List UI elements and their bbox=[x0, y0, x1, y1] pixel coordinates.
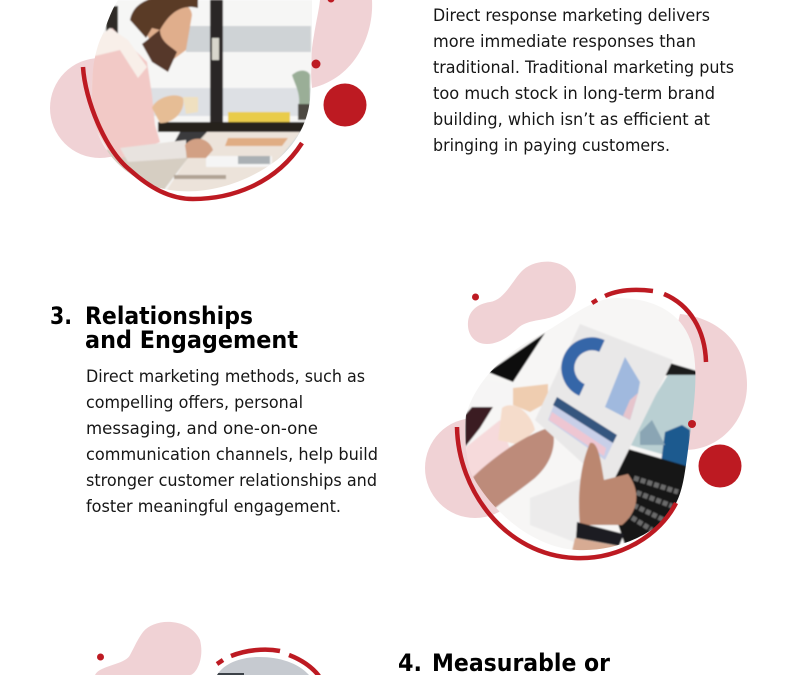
decorative pink blob top right bbox=[311, 0, 372, 88]
section 2 body text: Direct response marketing delivers bbox=[433, 6, 710, 25]
photo top bbox=[217, 657, 309, 675]
section 3 heading: Relationships bbox=[85, 302, 253, 330]
red arc under photo bbox=[83, 67, 302, 199]
large red circle bbox=[698, 444, 742, 488]
arc top bbox=[605, 290, 653, 296]
section 3 heading bbox=[50, 302, 298, 354]
arc top bbox=[231, 650, 280, 656]
section 3 body text: messaging, and one-on-one bbox=[86, 419, 318, 438]
man's head and hair bbox=[146, 6, 193, 60]
decorative pink blob bbox=[95, 622, 201, 675]
decorative pink circle left bbox=[425, 418, 525, 518]
section 2 body text: too much stock in long-term brand bbox=[433, 84, 715, 103]
section 3 heading: and Engagement bbox=[85, 326, 298, 354]
section 4 illustration: cropped photo bbox=[95, 622, 319, 675]
man's shirt bbox=[90, 28, 160, 158]
decorative pink blob top bbox=[468, 262, 576, 344]
photo: hands holding charts bbox=[465, 298, 696, 550]
section 3 body text: communication channels, help build bbox=[86, 445, 378, 464]
large red circle bbox=[324, 84, 366, 126]
front hand and watch bbox=[579, 443, 636, 525]
section 3 illustration: analytics report photo bbox=[425, 262, 747, 560]
arc dash bbox=[217, 660, 223, 664]
small red dot top left bbox=[472, 294, 479, 300]
desk bbox=[166, 131, 300, 192]
decorative pink circle left bbox=[50, 58, 150, 158]
arc dash top bbox=[592, 300, 597, 303]
section 2 illustration: office worker photo bbox=[50, 0, 372, 200]
left hand bbox=[473, 427, 554, 512]
section 3 heading: 3. bbox=[50, 302, 72, 330]
arc right bbox=[664, 294, 706, 362]
small red dot right bbox=[688, 420, 696, 428]
section 2 body text: traditional. Traditional marketing puts bbox=[433, 58, 734, 77]
section 3 body text: compelling offers, personal bbox=[86, 393, 303, 412]
section 3 body text bbox=[86, 367, 378, 516]
decorative pink blob right bbox=[660, 314, 747, 450]
report sheet bbox=[535, 324, 673, 488]
section 2 body text: building, which isn’t as efficient at bbox=[433, 110, 710, 129]
section 2 body text: more immediate responses than bbox=[433, 32, 696, 51]
small red dot on blob bbox=[312, 60, 320, 68]
small red dot bbox=[97, 654, 104, 660]
small red dot at top edge bbox=[328, 0, 334, 2]
section 3 body text: Direct marketing methods, such as bbox=[86, 367, 365, 386]
section 2 body text: bringing in paying customers. bbox=[433, 136, 670, 155]
section 2 body text bbox=[433, 6, 734, 155]
photo: man at desk bbox=[92, 0, 312, 192]
section 3 body text: stronger customer relationships and bbox=[86, 471, 377, 490]
arc right bbox=[289, 655, 319, 675]
arc bottom bbox=[457, 427, 676, 558]
section 3 body text: foster meaningful engagement. bbox=[86, 497, 341, 516]
